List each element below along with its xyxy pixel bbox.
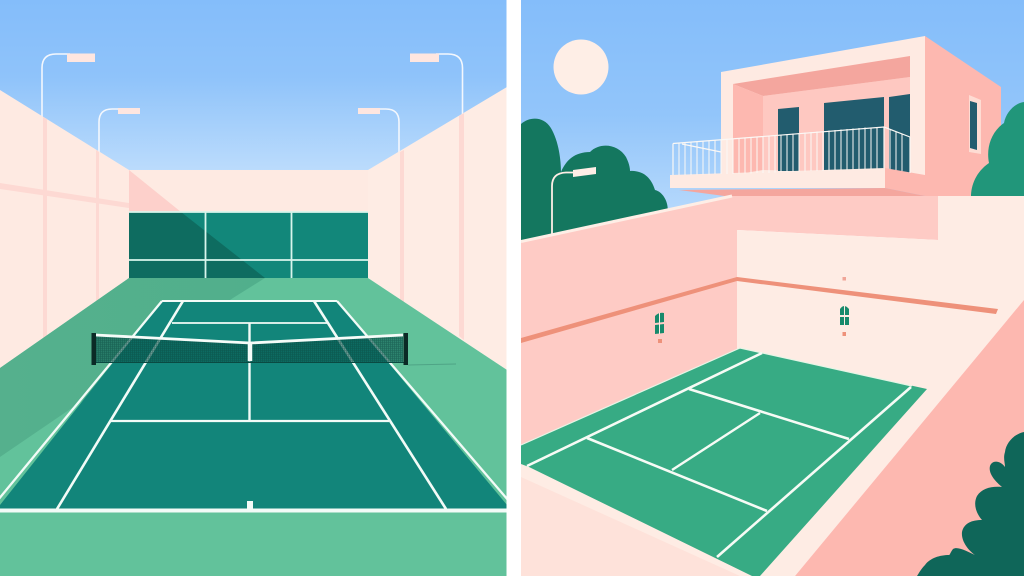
- street lamp: [552, 167, 596, 234]
- back fence: [129, 212, 368, 278]
- sky: [0, 0, 507, 172]
- trees behind wall: [521, 119, 668, 245]
- sun: [554, 40, 608, 94]
- left court wall: [521, 196, 938, 446]
- side window: [969, 95, 981, 154]
- balcony room: [733, 56, 910, 175]
- tennis net: [92, 333, 456, 365]
- panel: angled court with building: [521, 0, 1024, 576]
- wall top edge: [521, 196, 732, 242]
- court surface: [521, 348, 927, 576]
- floodlights above walls: [42, 54, 462, 156]
- left wall: [0, 90, 129, 368]
- back wall: [129, 170, 368, 211]
- wall vents and markers: [655, 277, 849, 343]
- court surface: [0, 301, 507, 510]
- floor: [0, 278, 507, 576]
- right wall: [368, 87, 507, 370]
- building front frame: [721, 36, 925, 176]
- balcony railing: [673, 127, 910, 175]
- foreground bush: [917, 432, 1024, 576]
- pink walkway: [795, 300, 1024, 576]
- sky: [521, 0, 1024, 230]
- salmon wall stripes: [521, 277, 998, 343]
- court lines: [0, 301, 508, 510]
- back court wall: [521, 230, 1007, 576]
- foreground ledge: [521, 477, 740, 576]
- panel: front view court: [0, 0, 508, 576]
- cream upper wall right: [938, 196, 1024, 320]
- building side: [925, 36, 1001, 197]
- balcony slab: [670, 168, 925, 197]
- tree right of building: [971, 102, 1024, 197]
- wall shadow: [129, 170, 181, 212]
- wall stripes and pole shadows: [0, 113, 464, 343]
- court lines: [521, 348, 912, 557]
- floor shadow: [0, 278, 265, 457]
